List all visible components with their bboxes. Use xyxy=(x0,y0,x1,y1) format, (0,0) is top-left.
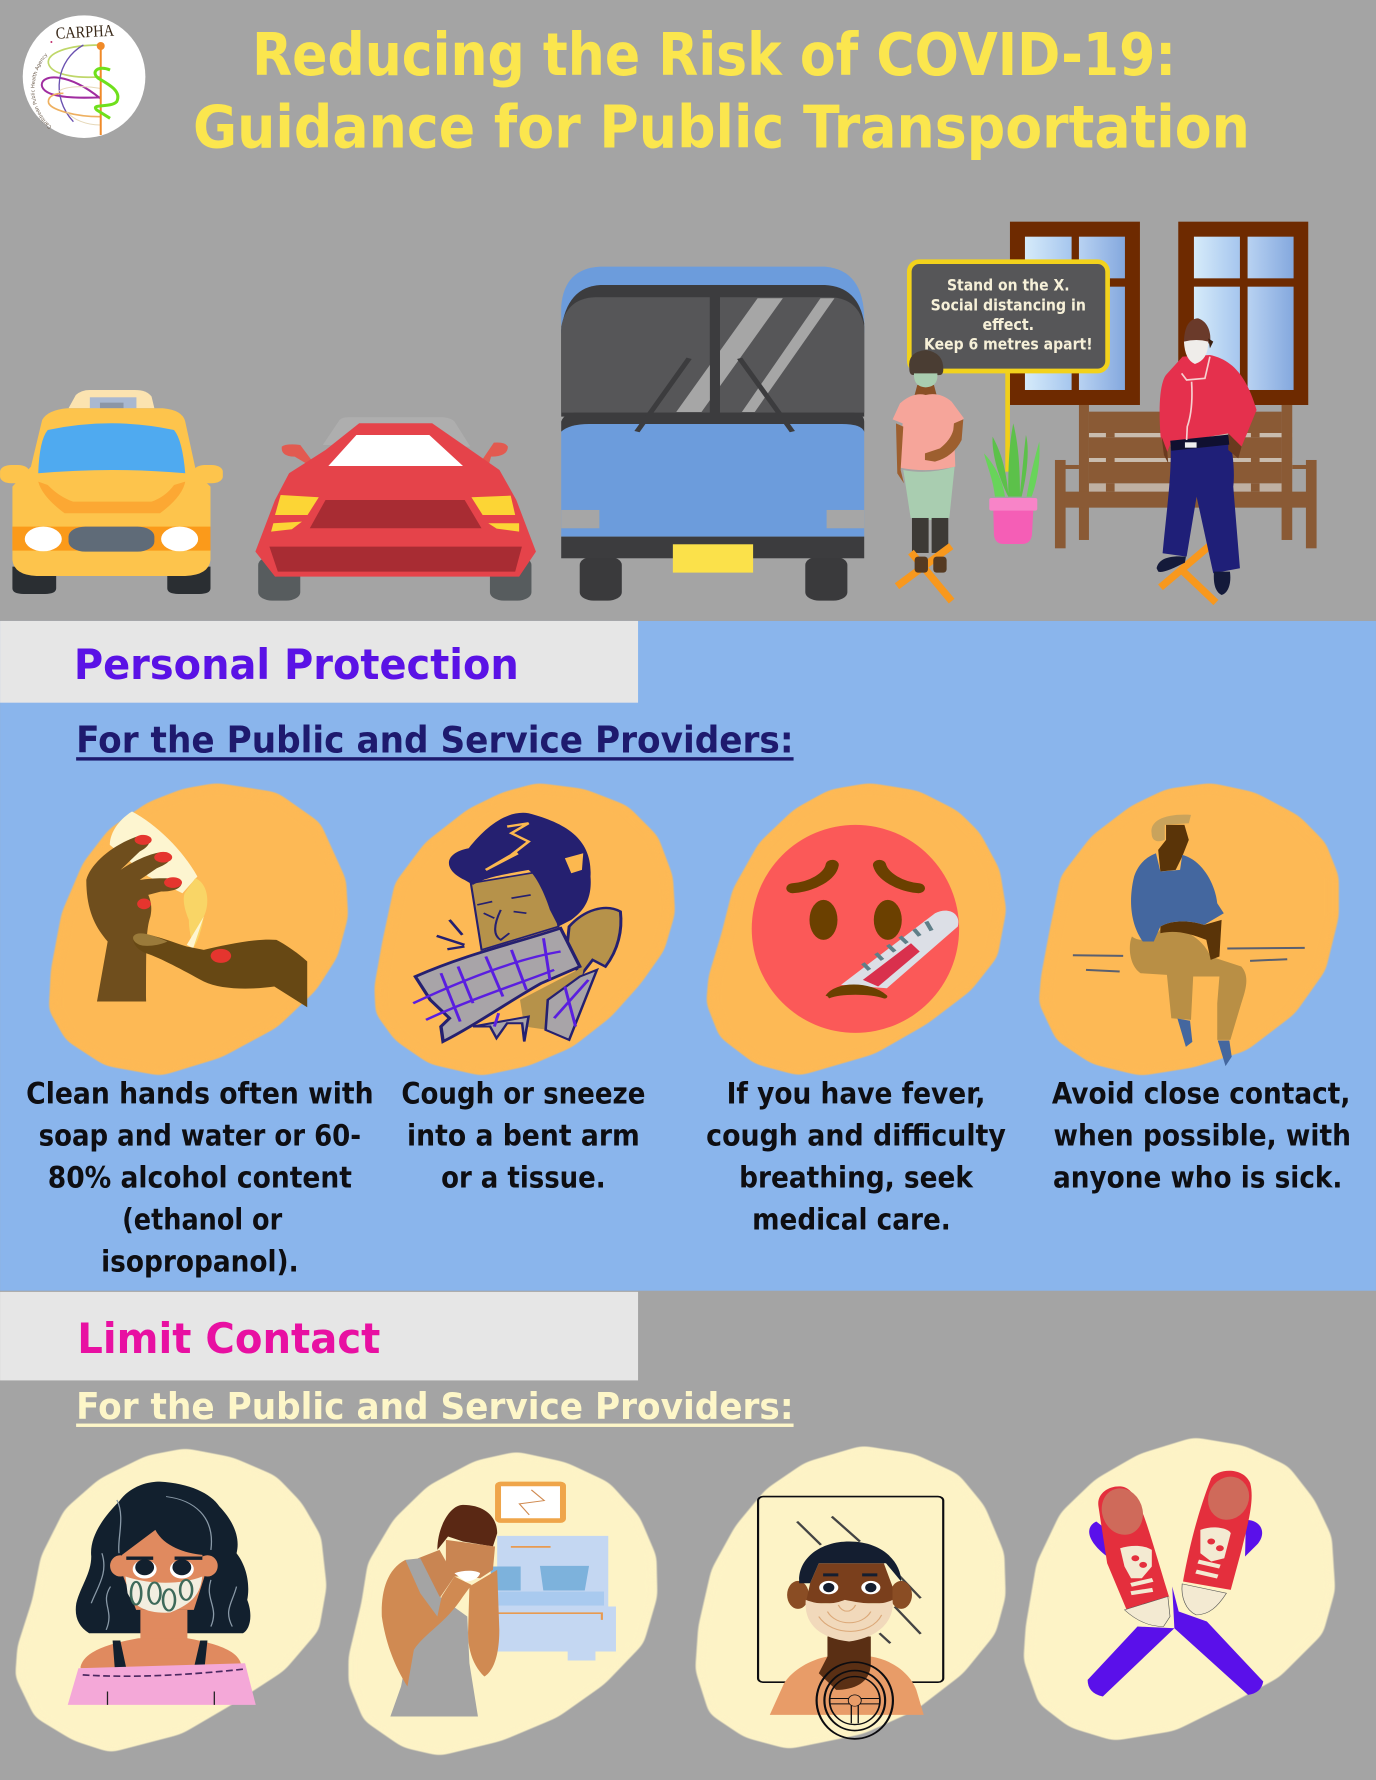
panel: personal protection background xyxy=(0,621,1376,1291)
sign board: Stand on the X. xyxy=(947,276,1070,295)
icon: bench xyxy=(1055,405,1317,548)
icon: yellow taxi xyxy=(0,390,223,594)
text block: avoid close contact xyxy=(1052,1076,1351,1194)
floor mark: orange X right xyxy=(1163,548,1213,600)
icon: coughing man xyxy=(376,784,674,1075)
section bar: Personal Protection xyxy=(0,621,638,703)
sign board: Social distancing in xyxy=(931,295,1086,314)
section bar: Personal Protection: Personal Protection xyxy=(74,640,519,689)
sign board xyxy=(909,262,1108,371)
text block: clean hands: isopropanol). xyxy=(101,1244,299,1278)
text block: seek medical care: medical care. xyxy=(752,1202,951,1236)
title xyxy=(193,20,1250,162)
text block: cough or sneeze: Cough or sneeze xyxy=(401,1076,645,1110)
section bar: Limit Contact xyxy=(0,1292,638,1380)
logo: CARPHA: CARPHA xyxy=(55,21,114,43)
icon: man keeping distance xyxy=(1040,784,1338,1075)
sign post xyxy=(1005,372,1010,472)
text block: seek medical care: cough and difficulty xyxy=(706,1118,1006,1152)
icon: window left xyxy=(1010,222,1140,405)
icon: potted plant xyxy=(984,423,1040,544)
figure: woman passenger xyxy=(893,350,964,553)
scene: bus stop with sign, windows, bench and passengers xyxy=(893,222,1317,600)
title: Guidance for Public Transportation xyxy=(193,93,1250,162)
text block: avoid close contact: Avoid close contact, xyxy=(1052,1076,1350,1110)
floor mark: orange X left xyxy=(900,548,949,598)
text block: cough or sneeze: into a bent arm xyxy=(407,1118,640,1152)
text block: seek medical care xyxy=(706,1076,1006,1236)
text block: seek medical care: If you have fever, xyxy=(727,1076,985,1110)
icon: blue bus xyxy=(561,267,864,601)
text block: cough or sneeze: or a tissue. xyxy=(441,1160,606,1194)
text block: avoid close contact: anyone who is sick. xyxy=(1053,1160,1342,1194)
text block: seek medical care: breathing, seek xyxy=(739,1160,974,1194)
title: Reducing the Risk of COVID-19: xyxy=(252,20,1176,89)
icon: shoes standing on X xyxy=(1025,1438,1334,1740)
logo: CARPHA xyxy=(22,15,146,138)
heading: for the public and service providers (blue section): For the Public and Service Providers: xyxy=(76,719,794,762)
text block: avoid close contact: when possible, with xyxy=(1054,1118,1351,1152)
icon: red car xyxy=(255,417,536,601)
text block: clean hands: 80% alcohol content xyxy=(48,1160,352,1194)
sign board: Keep 6 metres apart! xyxy=(924,335,1093,354)
heading: for the public and service providers (grey section): For the Public and Service Providers: xyxy=(76,1385,794,1428)
icon: driver wearing mask xyxy=(696,1447,1004,1748)
text block: clean hands: Clean hands often with xyxy=(26,1076,374,1110)
icon: hand sanitizer xyxy=(50,784,347,1075)
logo: CARPHA: Caribbean Public Health Agency xyxy=(30,53,51,129)
text block: clean hands xyxy=(26,1076,374,1278)
text block: cough or sneeze xyxy=(401,1076,645,1194)
icon: man sneezing by bed xyxy=(350,1453,656,1755)
figure: man passenger xyxy=(1157,318,1257,595)
icon: window right xyxy=(1178,222,1308,405)
icon: woman wearing mask xyxy=(16,1449,325,1752)
shoes: woman passenger xyxy=(915,557,947,573)
sign board: effect. xyxy=(982,315,1034,334)
icon: fever face with thermometer xyxy=(708,784,1005,1075)
section bar: Limit Contact: Limit Contact xyxy=(77,1314,380,1363)
text block: clean hands: soap and water or 60- xyxy=(39,1118,361,1152)
text block: clean hands: (ethanol or xyxy=(122,1202,283,1236)
